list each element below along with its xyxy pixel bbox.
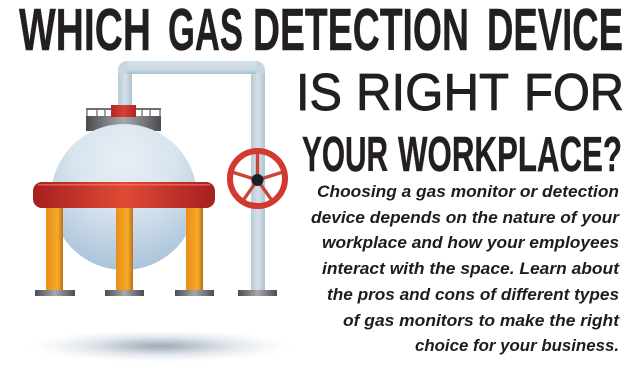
description text: workplace and how your employees [322, 234, 619, 252]
title line 2: FOR [524, 64, 624, 122]
description text: of gas monitors to make the right [343, 312, 621, 330]
title line 2: RIGHT [356, 64, 509, 122]
valve wheel [230, 151, 285, 206]
legs [46, 206, 203, 291]
red top flange [111, 105, 136, 117]
band highlight [38, 184, 210, 186]
pipe [118, 61, 265, 290]
description text: Choosing a gas monitor or detection [317, 183, 619, 201]
title [19, 0, 624, 182]
description text: the pros and cons of different types [327, 286, 619, 304]
description text: device depends on the nature of your [311, 209, 621, 227]
illustration: gas tank with pipe and valve [33, 61, 285, 296]
description text [311, 183, 621, 355]
title line 3: YOUR [302, 127, 388, 182]
title line 3 [302, 127, 622, 182]
title line 2 [296, 64, 624, 122]
ground shadow [28, 330, 292, 362]
title line 1 [19, 0, 623, 63]
title line 2: IS [296, 64, 342, 122]
description text: choice for your business. [415, 337, 619, 355]
tank sphere [51, 124, 197, 270]
tank collar [86, 116, 161, 131]
red band [33, 182, 215, 208]
tank railing [86, 109, 161, 117]
base plates [35, 290, 277, 296]
description text: interact with the space. Learn about [322, 260, 621, 278]
